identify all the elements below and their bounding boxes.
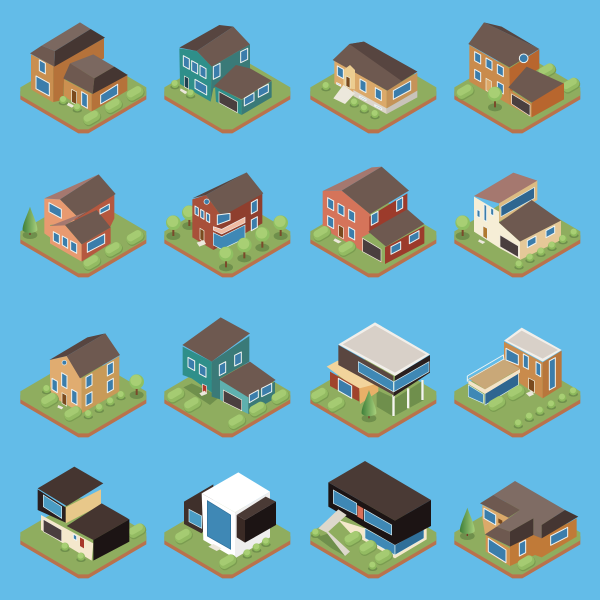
house	[333, 42, 417, 114]
plate	[454, 53, 580, 133]
ground floor and pillars	[327, 361, 424, 417]
bushes and shrubs	[486, 383, 578, 429]
shrubs and bushes	[59, 84, 146, 128]
plate	[164, 357, 290, 437]
bushes and shrubs	[311, 529, 395, 571]
panel: house 7 terracotta	[310, 167, 436, 277]
plate	[20, 498, 146, 578]
upper floor	[338, 322, 430, 397]
trees	[166, 215, 288, 271]
plate	[164, 197, 290, 277]
bushes	[311, 224, 358, 259]
panel: house 11 modern on pillars	[309, 322, 436, 437]
plate	[164, 53, 290, 133]
rear bushes	[536, 61, 582, 95]
panel: house 12 terrace	[454, 328, 580, 437]
rear bush	[126, 521, 148, 541]
house	[38, 467, 129, 561]
plate	[310, 53, 436, 133]
panel: house 2 teal	[164, 25, 290, 133]
plate	[454, 498, 580, 578]
panel: house 13 dark modern	[20, 467, 148, 578]
tree and bush	[460, 508, 537, 573]
plate	[310, 357, 436, 437]
shrubs	[321, 82, 380, 119]
bushes	[165, 386, 291, 432]
rear tree	[182, 205, 197, 230]
panel: house 4 brick with garage	[454, 22, 582, 133]
plate	[164, 498, 290, 578]
house	[44, 174, 116, 262]
panel: house 10 teal with garage	[164, 317, 291, 437]
house	[182, 317, 276, 414]
house	[192, 172, 263, 250]
plate	[20, 53, 146, 133]
house	[49, 333, 120, 413]
panel: house 1 orange two-storey	[20, 22, 146, 133]
plate	[454, 197, 580, 277]
tree and bushes	[23, 207, 146, 273]
house	[467, 328, 562, 405]
plate	[310, 498, 436, 578]
panel: house 6 red brick with trees	[164, 172, 290, 277]
house	[468, 22, 564, 117]
panel: house 16 hip roof bungalow	[454, 481, 580, 578]
house	[317, 461, 431, 558]
house	[179, 25, 272, 115]
plate	[20, 197, 146, 277]
panel: house 5 coral	[20, 174, 146, 277]
tree, bushes and shrubs	[39, 374, 144, 424]
tree and shrubs	[455, 215, 579, 270]
plate	[20, 357, 146, 437]
house	[184, 472, 276, 558]
panel: house 8 cream modern	[454, 173, 580, 277]
plate	[310, 197, 436, 277]
tree and bushes	[309, 386, 376, 422]
panel: house 3 tan bungalow	[310, 42, 436, 133]
house	[323, 167, 424, 264]
plate	[454, 357, 580, 437]
shrubs	[170, 80, 195, 99]
shrubs	[60, 543, 86, 562]
house	[480, 481, 578, 566]
panel: house 15 dark slab modern	[310, 461, 436, 578]
house	[474, 173, 561, 260]
house	[30, 22, 128, 112]
panel: house 9 tan gabled	[20, 333, 146, 437]
tree and bush	[454, 82, 502, 111]
panel: house 14 white cube	[164, 472, 290, 578]
bushes and shrubs	[173, 527, 271, 572]
